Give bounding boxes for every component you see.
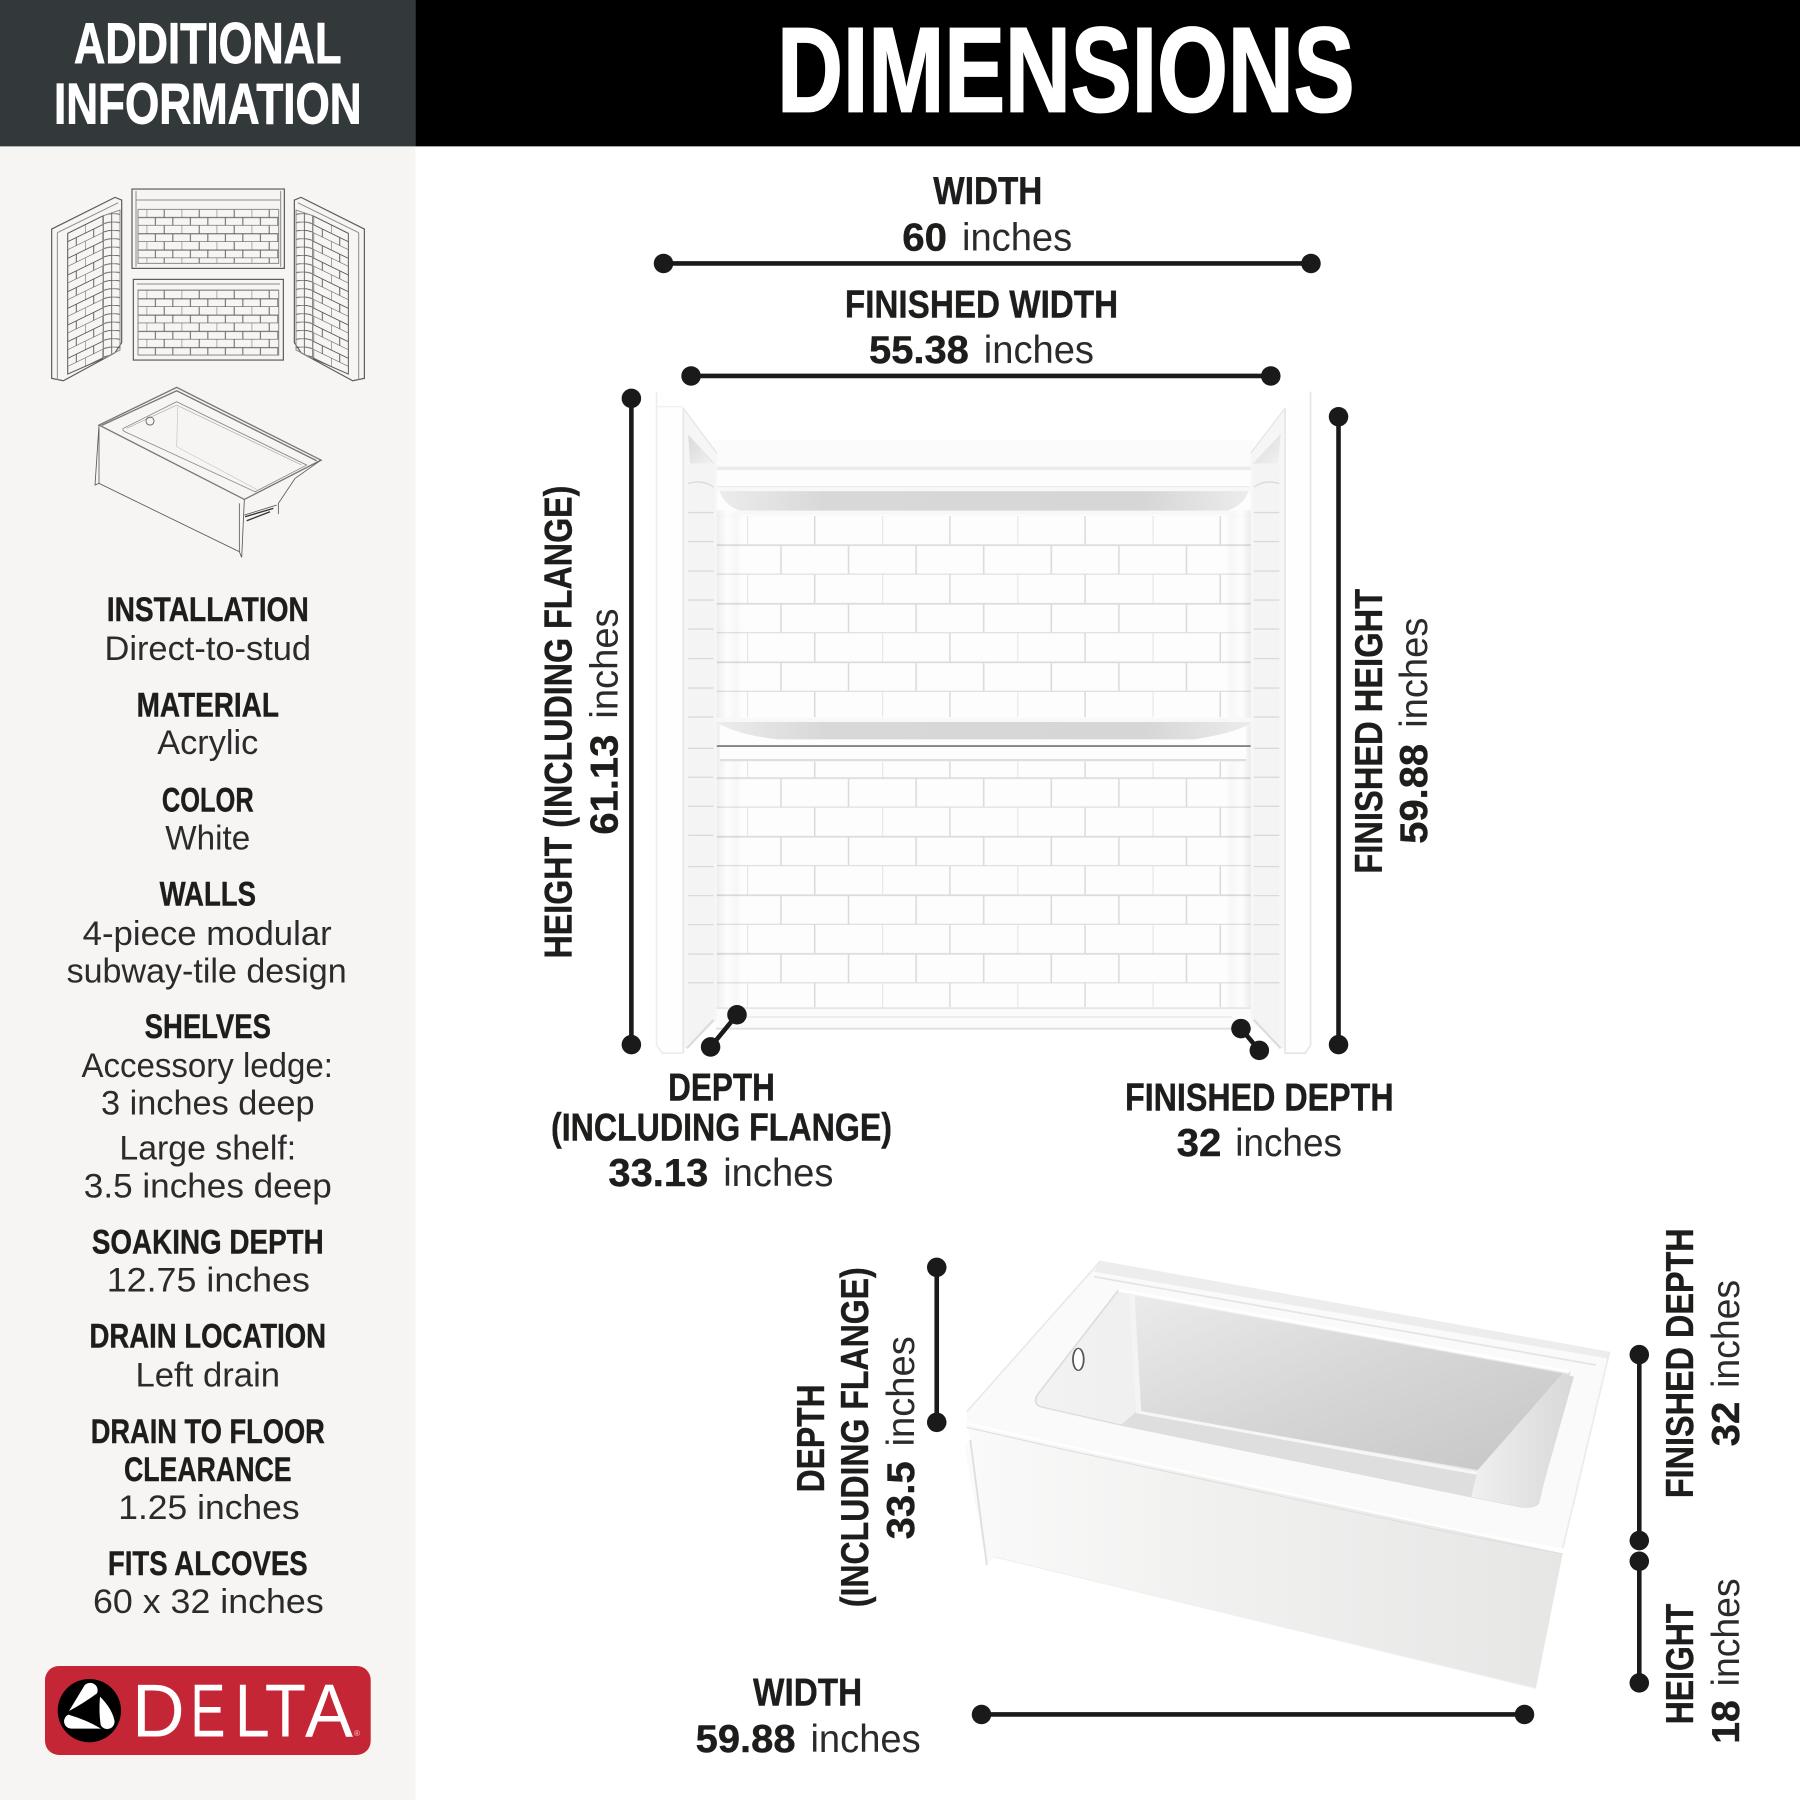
spec: material xyxy=(137,686,279,762)
spec: soaking depth xyxy=(92,1224,324,1299)
dimension: tub width label: WIDTH xyxy=(753,1671,862,1714)
dimension: depth marker xyxy=(701,1005,747,1057)
large shelf with rail xyxy=(715,718,1253,761)
logo wordmark: T xyxy=(265,1669,306,1753)
icon: wall panels line drawing xyxy=(52,189,364,557)
icon: top centre wall panel xyxy=(132,189,284,268)
spec: shelves: Accessory ledge: xyxy=(82,1047,333,1085)
dimension: height bar xyxy=(622,389,641,1054)
spec: drain to floor clearance: DRAIN TO FLOOR xyxy=(91,1413,325,1451)
dimension: tub width bar xyxy=(972,1705,1534,1724)
logo wordmark xyxy=(132,1669,353,1753)
dimension: tub depth label: 33.5 xyxy=(880,1461,923,1539)
logo: delta xyxy=(45,1666,371,1755)
dimension: height label: HEIGHT (INCLUDING FLANGE) xyxy=(538,486,581,959)
right side wall and flange xyxy=(1251,392,1311,1053)
dimension: finished height bar xyxy=(1329,407,1348,1054)
specs list xyxy=(67,591,347,1621)
spec: fits alcoves: 60 x 32 inches xyxy=(93,1583,324,1621)
dimension: depth label: (INCLUDING FLANGE) xyxy=(551,1106,892,1149)
dimension: tub width label xyxy=(696,1671,921,1761)
spec: shelves: 3 inches deep xyxy=(101,1085,315,1123)
header: additional information: ADDITIONAL xyxy=(74,12,342,76)
spec: soaking depth: 12.75 inches xyxy=(107,1261,310,1299)
dimension: finished depth label: inches xyxy=(1235,1122,1342,1165)
spec: drain to floor clearance xyxy=(91,1413,325,1527)
dimension: tub finished depth label: FINISHED DEPTH xyxy=(1659,1228,1702,1498)
dimension: width label: inches xyxy=(962,216,1072,259)
spec: walls: subway-tile design xyxy=(67,953,347,991)
icon: delta emblem xyxy=(58,1679,121,1742)
dimension: finished width label: inches xyxy=(984,329,1094,372)
spec: color: White xyxy=(165,819,250,857)
dimension: tub finished depth label: 32 xyxy=(1705,1402,1748,1446)
dimension: tub finished depth bar xyxy=(1630,1345,1649,1550)
spec: walls: 4-piece modular xyxy=(83,915,332,953)
dimension: tub height label: inches xyxy=(1705,1578,1748,1686)
dimension: depth label: inches xyxy=(723,1152,833,1195)
logo wordmark: D xyxy=(132,1669,185,1753)
spec: material: Acrylic xyxy=(157,724,258,762)
dimension: tub depth label xyxy=(790,1267,923,1607)
dimension: tub width label: inches xyxy=(810,1718,921,1761)
spec: installation: Direct-to-stud xyxy=(104,630,311,668)
dimension: tub finished depth label: inches xyxy=(1705,1280,1748,1388)
dimension: height label xyxy=(538,486,627,959)
tub rim xyxy=(967,1261,1610,1554)
dimension: width label: WIDTH xyxy=(933,170,1042,213)
dimension: tub height label xyxy=(1659,1578,1748,1744)
dimension: finished width bar xyxy=(681,366,1281,386)
header: additional information: INFORMATION xyxy=(54,72,362,136)
dimension: depth label: 33.13 xyxy=(608,1152,708,1195)
logo wordmark: E xyxy=(190,1669,225,1753)
dimension: width bar xyxy=(654,254,1321,273)
dimension: height label: inches xyxy=(584,608,627,719)
spec: drain location: Left drain xyxy=(135,1357,280,1395)
header: dimensions title xyxy=(416,0,1800,146)
icon: right wall panel xyxy=(294,197,364,381)
spec: fits alcoves xyxy=(93,1545,324,1621)
spec: material: MATERIAL xyxy=(137,686,279,724)
registered mark: ® xyxy=(354,1729,360,1738)
dimension: finished height label xyxy=(1348,589,1436,874)
dimension: finished height label: FINISHED HEIGHT xyxy=(1348,589,1391,874)
tub basin xyxy=(1036,1290,1574,1507)
sidebar background xyxy=(0,146,416,1800)
top shelf xyxy=(717,487,1250,515)
tub photo xyxy=(965,1261,1610,1688)
top trim band xyxy=(714,440,1254,487)
dimension: tub width label: 59.88 xyxy=(696,1718,796,1761)
header: dimensions title: DIMENSIONS xyxy=(777,2,1355,137)
spec: shelves: Large shelf: xyxy=(119,1129,296,1167)
logo wordmark: A xyxy=(305,1669,353,1753)
tub apron xyxy=(965,1425,1563,1688)
spec: installation: INSTALLATION xyxy=(107,591,309,629)
dimension: height label: 61.13 xyxy=(584,735,627,835)
spec: drain to floor clearance: CLEARANCE xyxy=(124,1451,292,1489)
dimension: depth label: DEPTH xyxy=(668,1066,775,1109)
bottom threshold xyxy=(716,1007,1252,1030)
dimension: tub finished depth label xyxy=(1659,1228,1748,1498)
dimension: tub height label: 18 xyxy=(1705,1700,1748,1744)
spec: fits alcoves: FITS ALCOVES xyxy=(108,1545,308,1583)
header: additional information xyxy=(0,0,416,146)
back wall tiles xyxy=(688,440,1281,1029)
spec: drain location: DRAIN LOCATION xyxy=(90,1318,326,1356)
dimension: finished depth marker xyxy=(1231,1019,1269,1060)
dimension: tub height label: HEIGHT xyxy=(1659,1604,1702,1724)
shower wall photo xyxy=(657,392,1311,1053)
wall corner shading xyxy=(715,510,1253,1008)
spec: installation xyxy=(104,591,311,668)
dimension: finished height label: 59.88 xyxy=(1393,744,1436,844)
dimension: tub depth label: inches xyxy=(880,1336,923,1446)
dimension: tub depth label: (INCLUDING FLANGE) xyxy=(834,1267,877,1607)
icon: bottom centre wall panel xyxy=(133,279,283,360)
logo wordmark: L xyxy=(235,1669,270,1753)
spec: walls: WALLS xyxy=(160,876,256,914)
dimension: tub depth bar xyxy=(927,1258,946,1432)
tub drain xyxy=(1073,1348,1084,1370)
spec: soaking depth: SOAKING DEPTH xyxy=(92,1224,324,1262)
spec: drain location xyxy=(90,1318,326,1395)
spec: color xyxy=(162,782,254,857)
dimension: finished width label xyxy=(845,283,1118,372)
icon: tub line drawing xyxy=(95,387,321,557)
dimension: finished depth label: FINISHED DEPTH xyxy=(1125,1077,1394,1120)
dimension: finished width label: 55.38 xyxy=(869,329,969,372)
dimension: width label xyxy=(902,170,1072,259)
dimension: tub depth label: DEPTH xyxy=(790,1384,833,1492)
icon: left wall panel xyxy=(52,197,122,381)
dimension: tub height bar xyxy=(1630,1551,1649,1693)
dimension: width label: 60 xyxy=(902,216,947,259)
spec: shelves xyxy=(82,1008,333,1205)
left side wall and flange xyxy=(657,392,717,1053)
spec: shelves: SHELVES xyxy=(145,1008,271,1046)
spec: color: COLOR xyxy=(162,782,254,820)
dimension: finished height label: inches xyxy=(1393,618,1436,728)
dimension: depth label xyxy=(551,1066,892,1195)
dimension: finished depth label: 32 xyxy=(1177,1122,1221,1165)
dimension: finished width label: FINISHED WIDTH xyxy=(845,283,1118,326)
spec: walls xyxy=(67,876,347,991)
spec: shelves: 3.5 inches deep xyxy=(84,1167,332,1205)
spec: drain to floor clearance: 1.25 inches xyxy=(118,1489,300,1527)
dimension: finished depth label xyxy=(1125,1077,1394,1165)
